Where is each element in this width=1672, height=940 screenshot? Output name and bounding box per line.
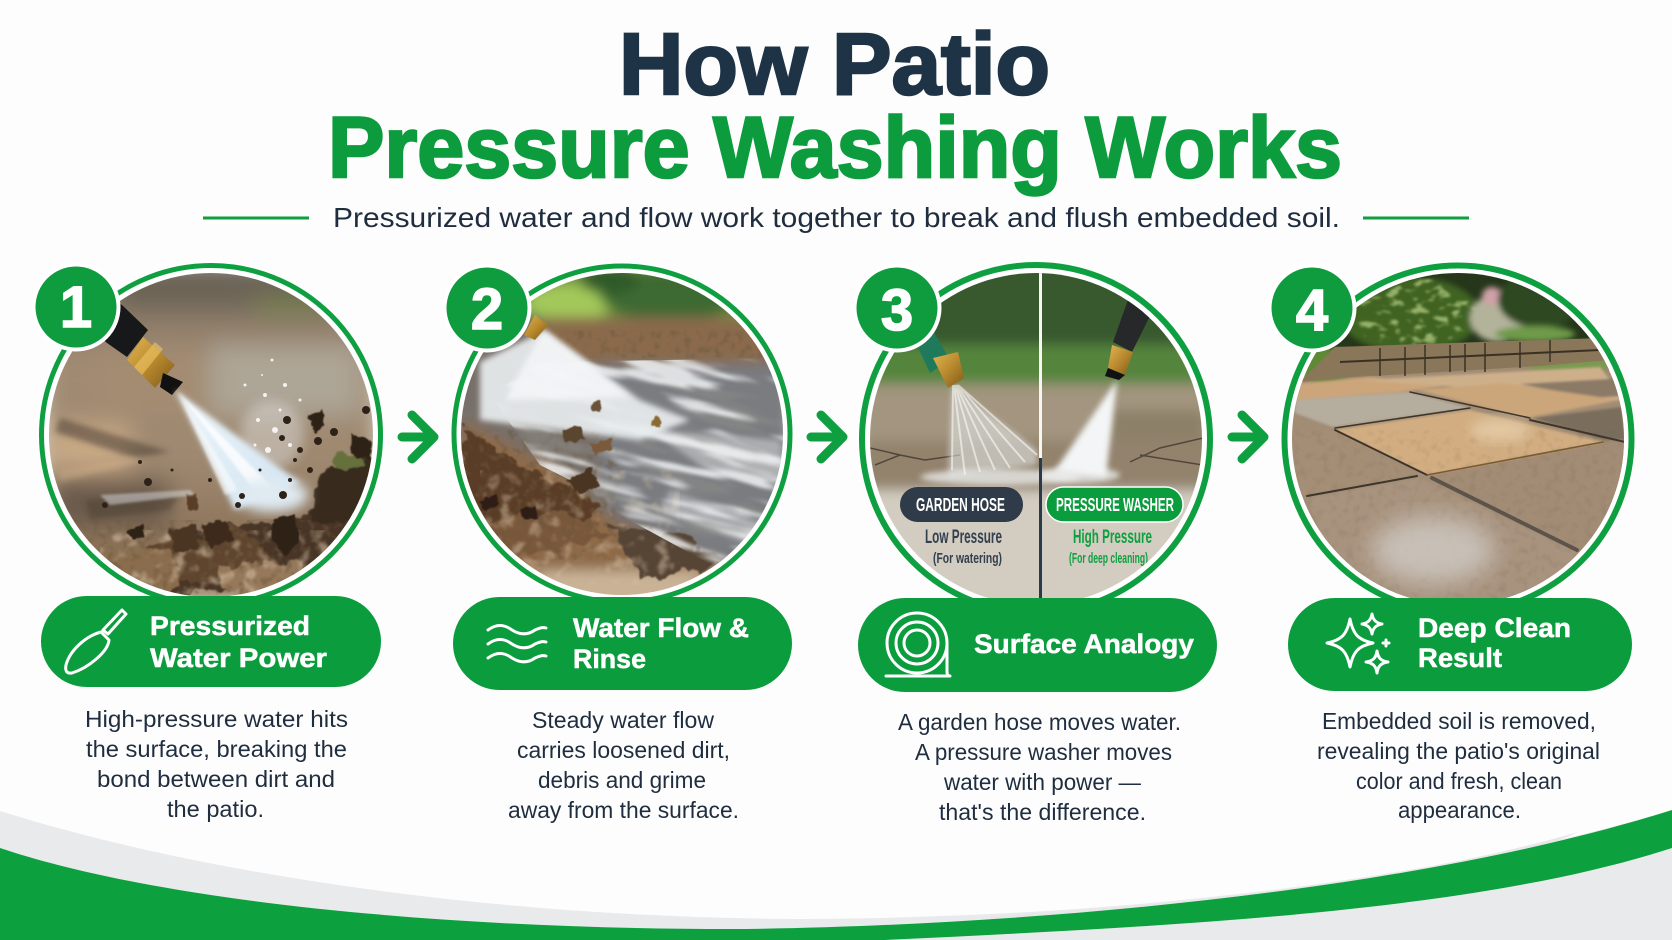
subtitle with rules: Pressurized water and flow work together to break and flush embedded soil. [333,202,1340,233]
hose and fittings [912,300,1152,388]
label: garden hose: GARDEN HOSE [916,495,1005,515]
heading pill: Surface Analogy: Surface Analogy [974,629,1194,659]
garden wall [1300,338,1610,382]
number badge 2 [442,264,532,352]
nozzle [104,304,183,395]
description 3: that's the difference. [939,799,1146,825]
title [328,16,1342,196]
icon: nozzle [66,610,126,673]
description 4: Embedded soil is removed, [1322,708,1596,734]
number badge 3 [852,264,942,352]
icon: sparkles [1327,614,1389,673]
heading pill: Pressurized Water Power: Pressurized [150,611,310,641]
description 4: revealing the patio's original [1317,738,1600,764]
description 1: High-pressure water hits [85,706,348,732]
photo: pressure jet blasting dirt [40,260,380,604]
panel: step 1 [32,260,381,822]
description 1: bond between dirt and [97,766,335,792]
description 3: A garden hose moves water. [898,709,1181,735]
label: pressure washer: High Pressure [1073,527,1152,548]
bottom swoosh band [0,810,1672,940]
panel: step 2 [446,264,792,823]
icon: coiled hose [886,613,950,676]
label: pressure washer [1046,487,1183,567]
panel: step 3 [852,260,1220,825]
label: garden hose: (For watering) [933,550,1002,567]
description 3: A pressure washer moves [915,739,1172,765]
heading pill: Pressurized Water Power [41,596,381,687]
heading pill: Water Flow & Rinse [453,597,792,690]
description 2 [508,707,739,823]
description 2: carries loosened dirt, [517,737,730,763]
label: pressure washer: (For deep cleaning) [1069,550,1148,567]
arrow 1 [402,415,434,459]
arrow 2 [811,415,843,459]
spray fans [948,380,1117,477]
number badge 4: 4 [1296,278,1328,343]
description 3: water with power — [943,769,1141,795]
description 4: color and fresh, clean [1356,768,1562,794]
description 1: the patio. [167,796,264,822]
description 2: Steady water flow [532,707,714,733]
photo: garden hose vs pressure washer [860,260,1220,620]
number badge 4 [1268,264,1356,352]
heading pill: Pressurized Water Power: Water Power [150,643,328,673]
title: Pressure Washing Works [328,100,1342,196]
heading pill: Water Flow & Rinse: Water Flow & [573,613,749,643]
icon: water waves [488,626,546,662]
number badge 3: 3 [881,278,913,343]
label: garden hose [900,487,1023,567]
description 1 [85,706,348,822]
description 3 [898,709,1181,825]
heading pill: Deep Clean Result: Deep Clean [1418,613,1571,643]
label: garden hose: Low Pressure [925,527,1002,548]
number badge 1 [32,262,120,352]
photo: clean patio [1280,260,1640,620]
description 1: the surface, breaking the [86,736,347,762]
heading pill: Surface Analogy [858,598,1217,692]
photo: water flow carrying dirt [452,264,792,597]
number badge 1: 1 [60,275,92,340]
paving slabs [1295,367,1625,610]
label: pressure washer: PRESSURE WASHER [1056,495,1174,515]
description 4: appearance. [1398,797,1521,823]
number badge 2: 2 [471,277,503,342]
title: How Patio [619,16,1050,113]
description 2: away from the surface. [508,797,739,823]
description 4 [1317,708,1600,823]
description 2: debris and grime [538,767,706,793]
heading pill: Deep Clean Result [1288,598,1632,691]
panel: step 4 [1268,260,1640,823]
heading pill: Water Flow & Rinse: Rinse [573,644,646,674]
heading pill: Deep Clean Result: Result [1418,643,1502,673]
arrow 3 [1232,415,1264,459]
